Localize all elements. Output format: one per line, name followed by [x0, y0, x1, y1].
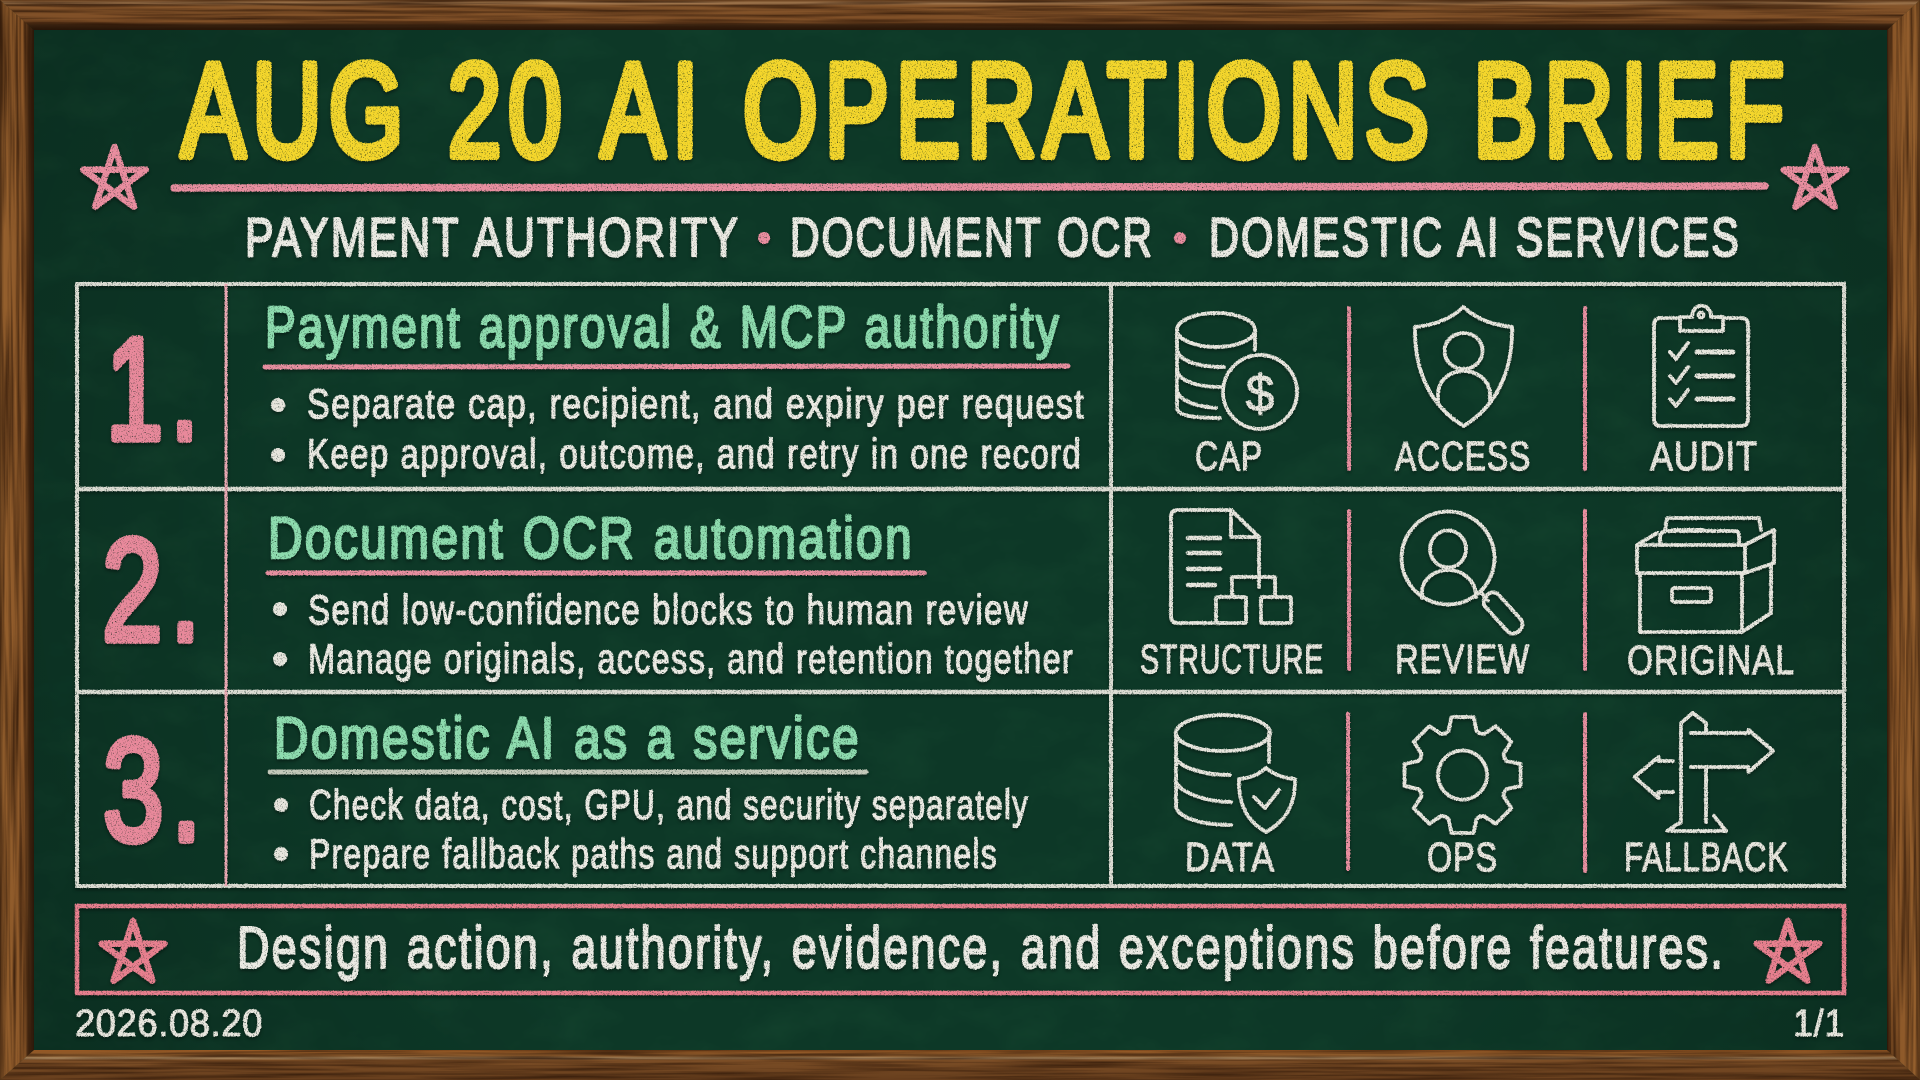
icon: cap coins and dollar: $: [1246, 365, 1275, 423]
footer page number: 1/1: [1793, 1003, 1845, 1045]
label: CAP: CAP: [1195, 433, 1263, 479]
label: ACCESS: ACCESS: [1395, 433, 1531, 479]
bullet list: Send low-confidence blocks to human review: [308, 586, 1029, 633]
bullet list: Keep approval, outcome, and retry in one record: [307, 430, 1082, 477]
pink icon dividers: [1348, 308, 1585, 871]
bullet list: Separate cap, recipient, and expiry per request: [307, 380, 1085, 427]
number 2: 2.: [102, 509, 208, 671]
heading: document OCR: Document OCR automation: [268, 506, 914, 571]
subtitle: PAYMENT AUTHORITY: [245, 206, 740, 268]
bullet list: [273, 586, 1074, 682]
icon: data cylinder with shield: [1176, 715, 1295, 832]
heading underline: [268, 570, 924, 576]
panel: callout: [77, 906, 1844, 993]
label: FALLBACK: FALLBACK: [1624, 834, 1789, 880]
label: AUDIT: AUDIT: [1650, 433, 1758, 479]
icon: callout right star: [1757, 921, 1819, 981]
icon: audit clipboard: [1654, 306, 1748, 426]
icon: ops gear: [1404, 717, 1520, 833]
bullet list: Prepare fallback paths and support channels: [309, 830, 998, 877]
label: OPS: OPS: [1427, 834, 1498, 880]
panel: row 1 payment approval: [106, 295, 1085, 477]
icon: structure document tree: [1171, 510, 1291, 623]
bullet list: Manage originals, access, and retention together: [308, 635, 1074, 682]
callout border: [77, 906, 1844, 993]
bullet list: [271, 380, 1085, 477]
icon: callout left star: [102, 921, 164, 981]
icon: original archive box: [1637, 518, 1774, 632]
number 1: 1.: [106, 308, 206, 470]
heading: payment approval: Payment approval & MCP authority: [265, 295, 1061, 360]
subtitle: DOCUMENT OCR: [790, 206, 1154, 268]
number 3: 3.: [103, 709, 209, 871]
heading underline: [265, 366, 1068, 367]
label: STRUCTURE: STRUCTURE: [1140, 636, 1324, 682]
icon: fallback signpost: [1634, 713, 1773, 831]
panel: row 3 domestic AI: [103, 706, 1029, 877]
footer date: 2026.08.20: [75, 1003, 263, 1045]
icon: review magnifier with person: [1402, 512, 1526, 637]
label: DATA: DATA: [1185, 834, 1275, 880]
heading: domestic AI: Domestic AI as a service: [274, 706, 861, 771]
bullet list: Check data, cost, GPU, and security separately: [309, 781, 1029, 828]
subtitle: [245, 206, 1741, 268]
panel: row 2 document OCR: [102, 506, 1074, 682]
icon: right header star: [1784, 147, 1846, 207]
title underline: [174, 186, 1765, 188]
icon: cap coins and dollar: [1177, 313, 1297, 429]
label: REVIEW: REVIEW: [1395, 636, 1530, 682]
icon: left header star: [83, 147, 146, 207]
icon: access shield with person: [1415, 307, 1512, 426]
subtitle: DOMESTIC AI SERVICES: [1209, 206, 1741, 268]
bullet list: [274, 781, 1029, 877]
table grid: [77, 284, 1844, 886]
label: ORIGINAL: ORIGINAL: [1627, 637, 1795, 683]
heading underline: [270, 770, 866, 774]
